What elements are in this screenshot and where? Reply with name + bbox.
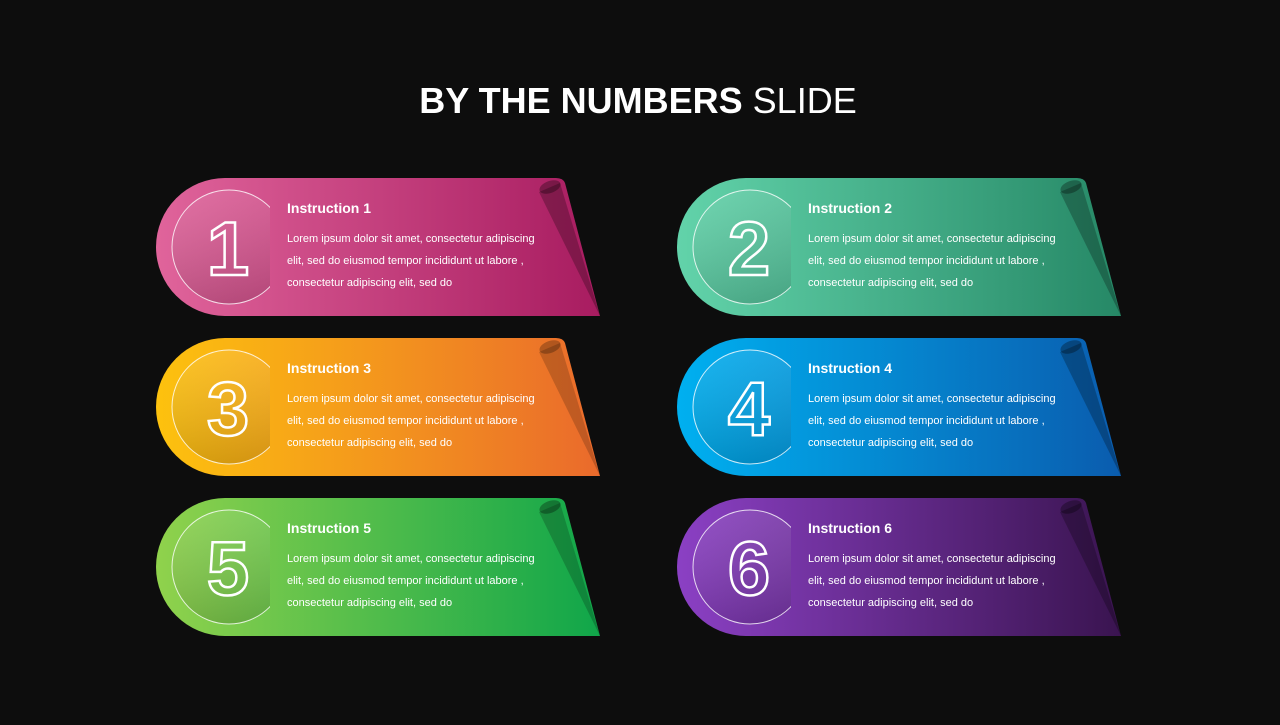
card 4: Instruction 4 xyxy=(808,360,892,376)
card 4 xyxy=(677,338,1121,476)
card 5: consectetur adipiscing elit, sed do xyxy=(287,597,452,609)
title: BY THE NUMBERS SLIDE xyxy=(419,80,857,121)
card 5: Lorem ipsum dolor sit amet, consectetur adipiscing xyxy=(287,553,535,565)
card 1: 1 xyxy=(207,207,249,292)
card 2: consectetur adipiscing elit, sed do xyxy=(808,277,973,289)
card 5: elit, sed do eiusmod tempor incididunt ut labore , xyxy=(287,575,524,587)
card 2: elit, sed do eiusmod tempor incididunt ut labore , xyxy=(808,255,1045,267)
card 3 xyxy=(156,338,600,476)
card 3: consectetur adipiscing elit, sed do xyxy=(287,437,452,449)
card 1: consectetur adipiscing elit, sed do xyxy=(287,277,452,289)
card 1 xyxy=(156,178,600,316)
card 2: Instruction 2 xyxy=(808,200,892,216)
card 6: elit, sed do eiusmod tempor incididunt ut labore , xyxy=(808,575,1045,587)
card 4: Lorem ipsum dolor sit amet, consectetur adipiscing xyxy=(808,393,1056,405)
card 4: 4 xyxy=(728,367,770,452)
card 3: Instruction 3 xyxy=(287,360,371,376)
card 6: Lorem ipsum dolor sit amet, consectetur adipiscing xyxy=(808,553,1056,565)
card 4: consectetur adipiscing elit, sed do xyxy=(808,437,973,449)
card 1: Lorem ipsum dolor sit amet, consectetur adipiscing xyxy=(287,233,535,245)
card 3: Lorem ipsum dolor sit amet, consectetur adipiscing xyxy=(287,393,535,405)
card 6: 6 xyxy=(728,527,770,612)
card 1: elit, sed do eiusmod tempor incididunt ut labore , xyxy=(287,255,524,267)
card 6: Instruction 6 xyxy=(808,520,892,536)
card 2: Lorem ipsum dolor sit amet, consectetur adipiscing xyxy=(808,233,1056,245)
card 2 xyxy=(677,178,1121,316)
card 6 xyxy=(677,498,1121,636)
card 6: consectetur adipiscing elit, sed do xyxy=(808,597,973,609)
card 2: 2 xyxy=(728,207,770,292)
card 3: 3 xyxy=(207,367,249,452)
card 4: elit, sed do eiusmod tempor incididunt ut labore , xyxy=(808,415,1045,427)
card 3: elit, sed do eiusmod tempor incididunt ut labore , xyxy=(287,415,524,427)
card 1: Instruction 1 xyxy=(287,200,371,216)
card 5 xyxy=(156,498,600,636)
card 5: 5 xyxy=(207,527,249,612)
card 5: Instruction 5 xyxy=(287,520,371,536)
